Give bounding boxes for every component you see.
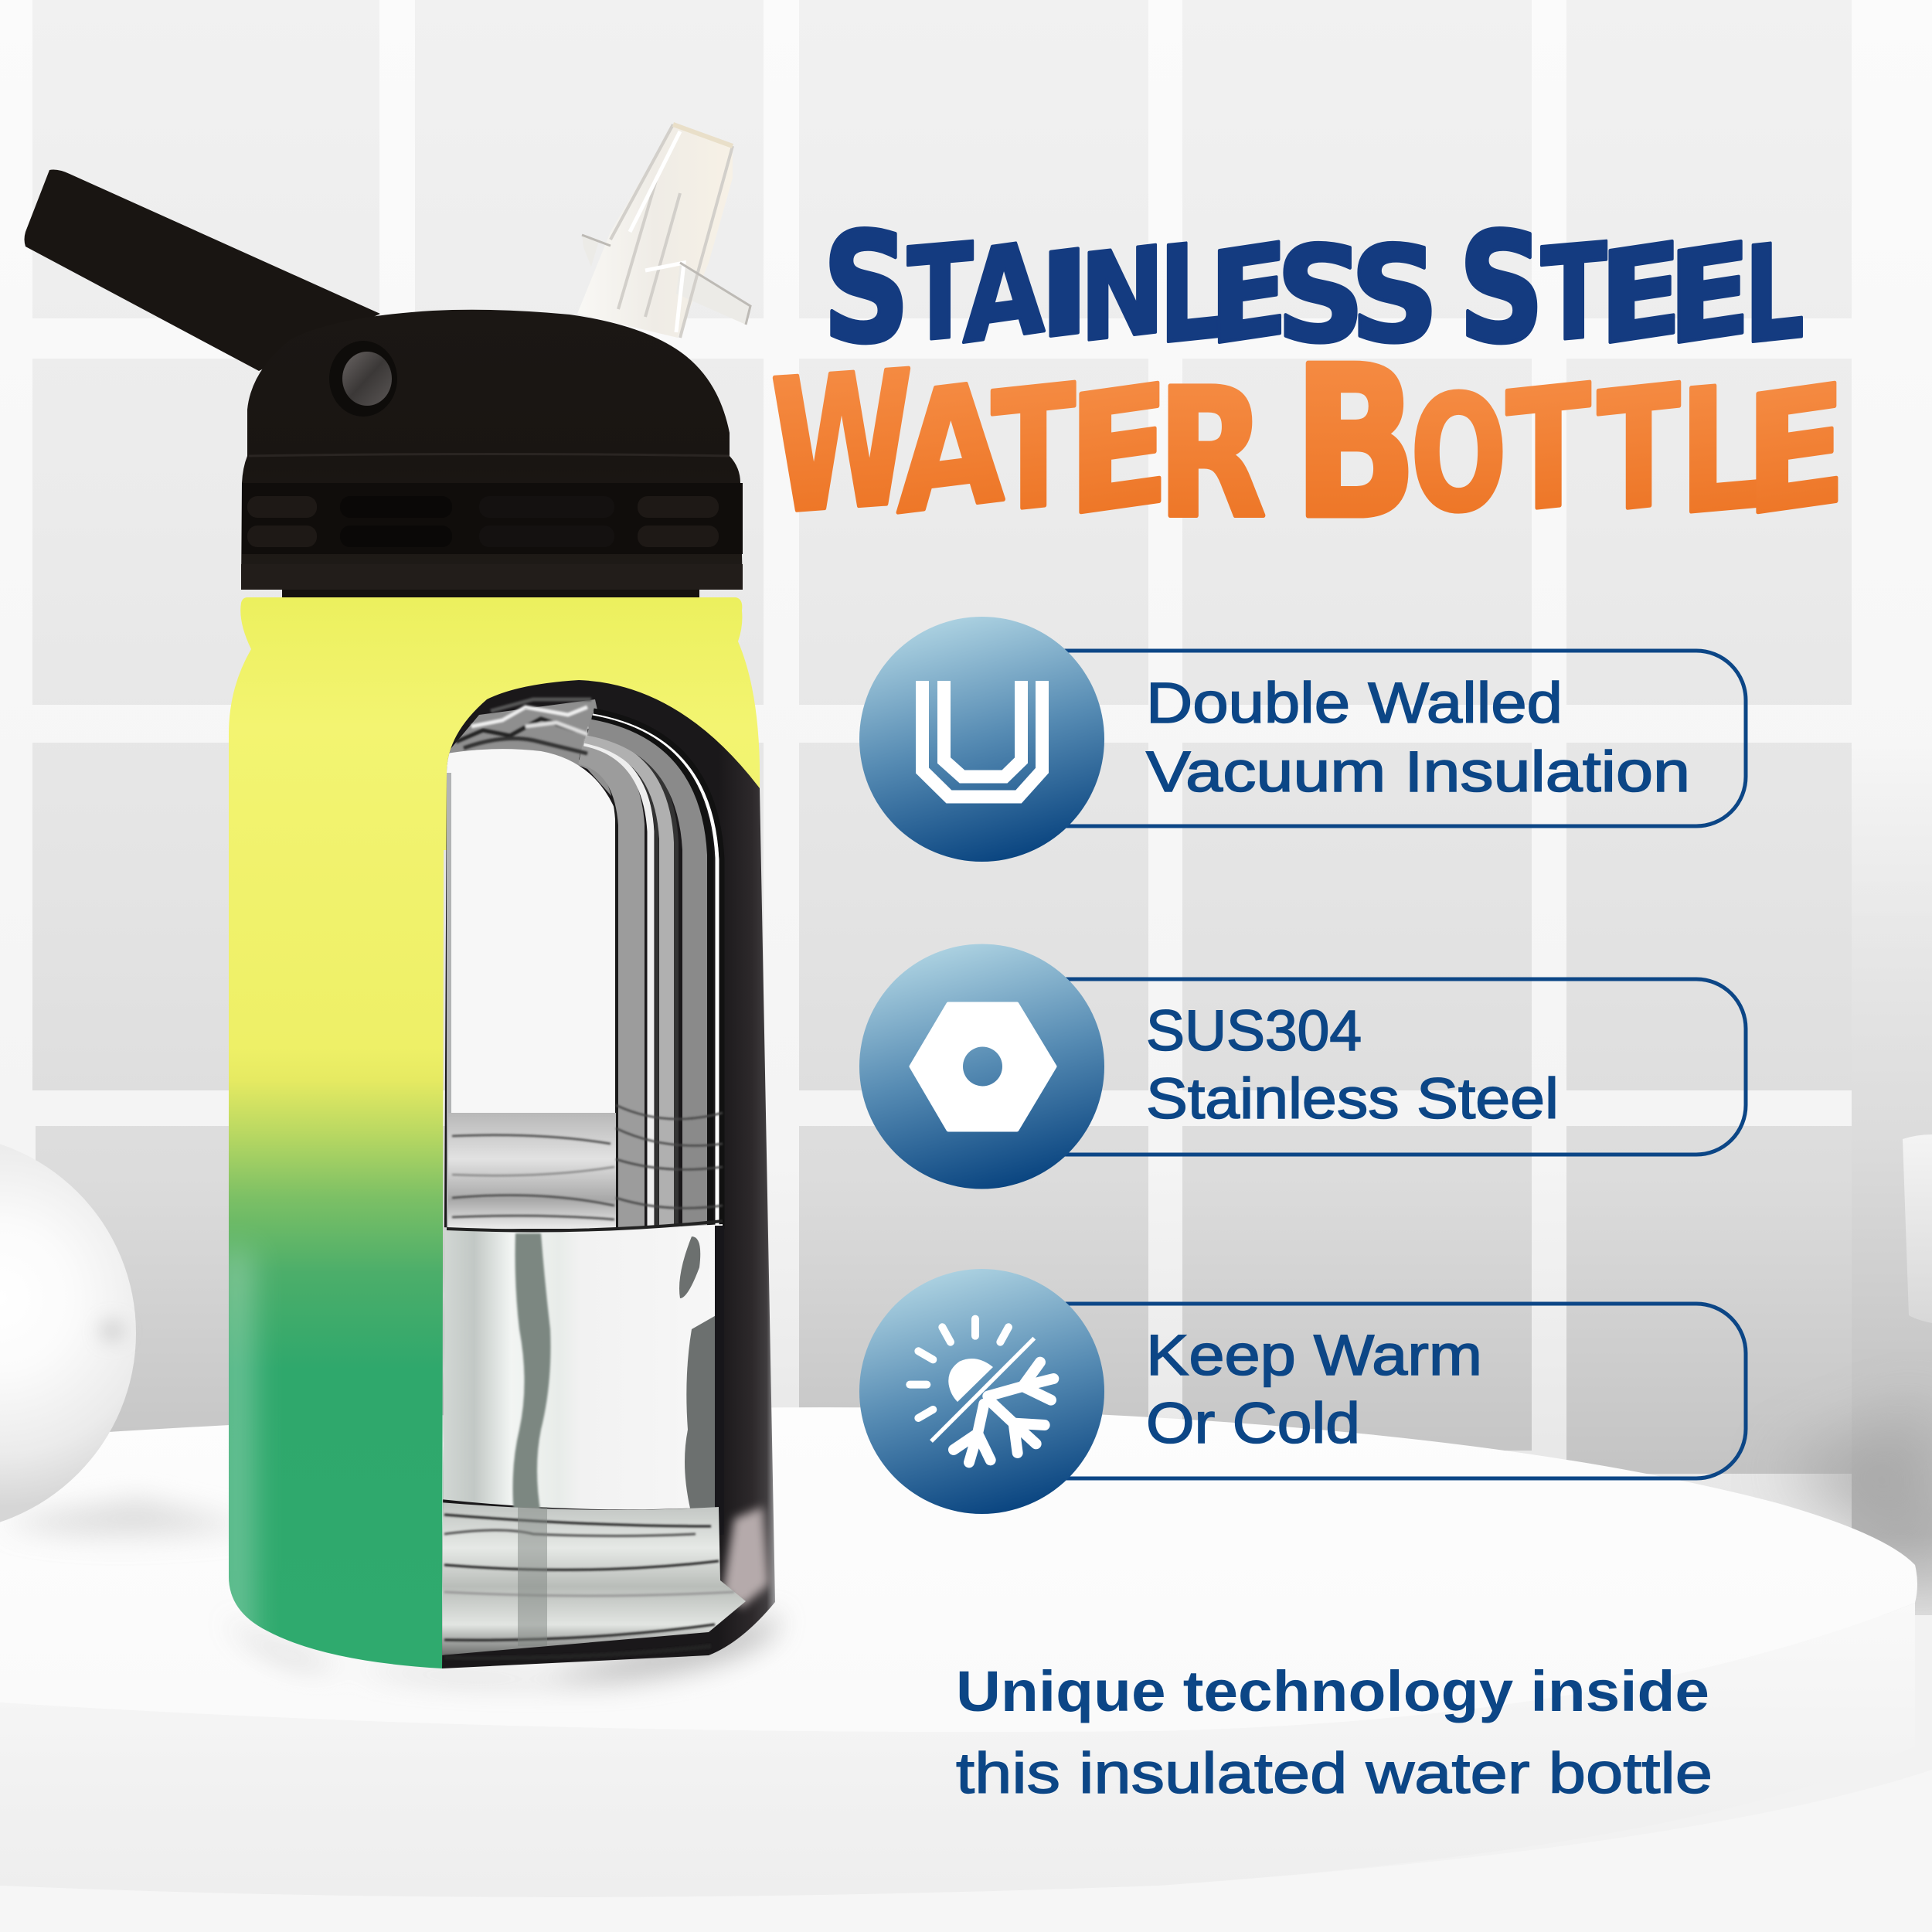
title: Water Bottle: T [992,350,1075,550]
icon: hex nut [911,1004,1055,1130]
title: Stainless Steel: E [1209,216,1288,374]
title: Stainless Steel: T [907,216,973,372]
cap rim [241,564,743,590]
water body [440,1224,723,1509]
title: Water Bottle: L [1679,349,1760,553]
label text: Vacuum Insulation [1146,740,1690,804]
title: Water Bottle: B [1293,323,1418,566]
bottom caption: this insulated water bottle [956,1741,1713,1805]
bottle painted body gradient [229,597,760,1668]
badge [859,1269,1104,1514]
feature: keep warm or cold [859,1269,1746,1514]
label text: Double Walled [1146,671,1563,735]
round white table [0,1407,1932,1932]
title: Stainless Steel: T [1541,216,1607,372]
lid seam [249,454,730,456]
dark shadow behind table edge [1777,1406,1932,1592]
label text: Or Cold [1146,1391,1360,1455]
hex nut rounded corners [911,1004,1055,1130]
label text [1146,998,1559,1131]
cap dome and band [241,310,743,590]
title: Water Bottle: T [1597,350,1680,550]
title: Stainless Steel [822,200,1804,377]
title: Stainless Steel: S [1350,219,1439,372]
icon: double wall U [923,681,1042,797]
crumpled top edge lines [456,699,591,753]
dark outer shell [440,672,781,1677]
dark inner channel [715,1226,724,1535]
ribbed grip [242,483,743,554]
bottom caption: Unique technology inside [956,1659,1709,1723]
outline box [1059,1304,1746,1478]
bottle [220,597,781,1682]
bottle contact shadow [224,1615,781,1682]
feature: double walled vacuum insulation [859,617,1746,862]
cut-away inner wall [440,672,781,1677]
water line [447,1221,723,1230]
title: Stainless Steel: S [822,200,910,376]
dark wavy reflection [513,1233,550,1515]
hinge pin [329,341,397,417]
bottle soft left sheen [220,1252,251,1654]
label text: Keep Warm [1146,1323,1482,1387]
icon: sun and snowflake [910,1319,1053,1462]
crumpled band above mirror panel [450,699,612,796]
pale reflection in shell foot [723,1507,769,1607]
title: Stainless Steel: S [1458,200,1545,377]
title: Water Bottle: E [1744,349,1847,553]
title: Water Bottle: A [897,346,1005,552]
bottle cap [241,310,743,597]
lower rings [440,1502,746,1655]
title: Water Bottle: W [770,333,913,556]
label text [1146,1323,1482,1455]
label text: Stainless Steel [1146,1066,1559,1131]
label text: SUS304 [1146,998,1362,1063]
ring streak lines [444,1515,734,1658]
upper mirror panel [447,749,616,1229]
straw [577,124,750,338]
title: Stainless Steel: I [1038,223,1090,366]
curved stripes of inner wall [580,711,722,1229]
dark blotches on water right [679,1236,715,1509]
title: Stainless Steel: E [1668,215,1751,374]
bottom caption [956,1659,1713,1805]
left white sphere [0,1134,255,1535]
badge [859,617,1104,862]
title: Water Bottle: O [1410,362,1507,548]
title: Stainless Steel: S [1276,219,1365,372]
outline box [1059,979,1746,1155]
outline box [1059,651,1746,826]
streaks above water [452,1105,723,1219]
label text [1146,671,1690,804]
title: Stainless Steel: A [963,214,1045,372]
title: Water Bottle: T [1506,349,1590,550]
title: Stainless Steel: N [1080,221,1165,370]
flip handle [25,170,380,371]
title: Stainless Steel: E [1599,215,1682,374]
title: Water Bottle [770,323,1847,566]
neck under cap [282,590,699,597]
reflected band above water [448,1113,616,1229]
title: Water Bottle: R [1157,352,1267,558]
feature: SUS304 stainless steel [859,944,1746,1189]
right background cup [1903,1134,1932,1323]
left mirror edge stripe [447,773,451,1236]
title: Stainless Steel: L [1159,214,1221,374]
badge [859,944,1104,1189]
title: Water Bottle: E [1067,349,1170,553]
dark centre of rings [518,1507,547,1646]
title: Stainless Steel: L [1744,214,1804,374]
